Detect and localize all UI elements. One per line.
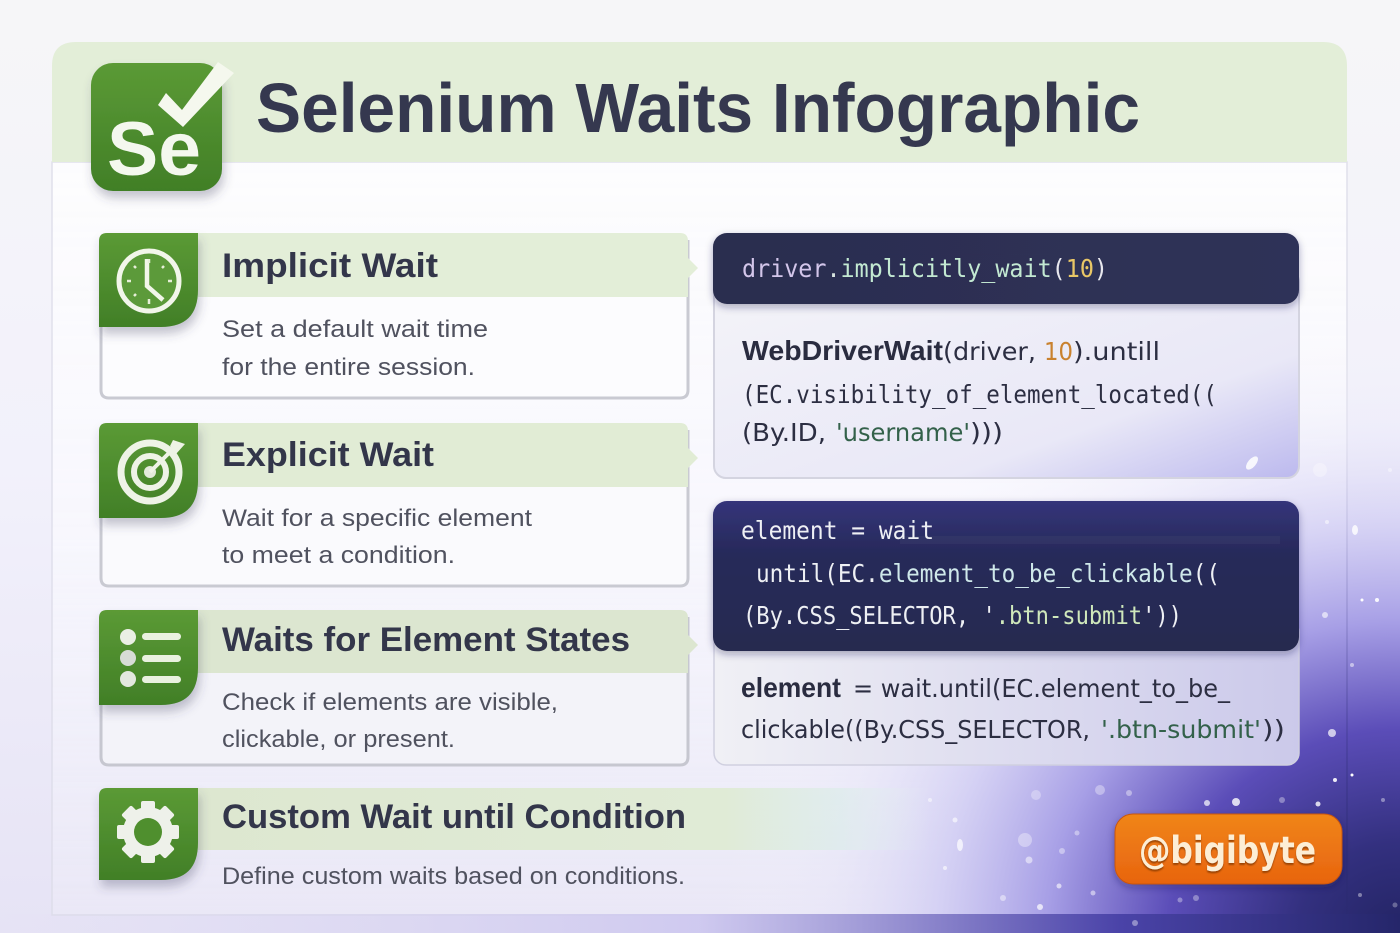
code body: WebDriverWait: 10	[1044, 337, 1073, 366]
code body: WebDriverWait: )))	[970, 418, 1003, 447]
description: for the entire session.	[222, 354, 475, 381]
description: Set a default wait time	[222, 316, 488, 343]
badge: @bigibyte	[1115, 814, 1342, 884]
code body: wait.until: clickable((By.CSS_SELECTOR,	[741, 715, 1090, 744]
code body: WebDriverWait: 'username'	[836, 418, 970, 447]
code panel: implicit and explicit wait	[713, 233, 1299, 478]
icon: clock	[99, 233, 198, 327]
logo check mark	[158, 62, 234, 127]
card: Waits for Element States	[99, 610, 698, 765]
description	[222, 689, 558, 753]
description: to meet a condition.	[222, 542, 455, 569]
code body: WebDriverWait: WebDriverWait	[742, 335, 943, 366]
icon: checklist	[99, 610, 198, 705]
title: Selenium Waits Infographic	[256, 69, 1140, 147]
logo: Selenium	[91, 62, 234, 192]
card: Implicit Wait	[99, 233, 698, 398]
code body: WebDriverWait: (driver,	[943, 337, 1036, 366]
code body: WebDriverWait	[742, 335, 1217, 447]
header band	[52, 42, 1347, 162]
code body: WebDriverWait: ).untill	[1073, 337, 1160, 366]
code header: wait until clickable: (By.CSS_SELECTOR, '.btn-submit'))	[743, 601, 1182, 630]
starfield	[928, 463, 1398, 926]
code header: wait until clickable	[713, 501, 1299, 651]
heading: Waits for Element States	[222, 621, 630, 659]
paint chip	[1244, 454, 1260, 472]
heading: Explicit Wait	[222, 436, 434, 474]
code body: wait.until	[741, 672, 1285, 744]
heading: Implicit Wait	[222, 247, 438, 285]
code body: WebDriverWait: (By.ID,	[742, 418, 826, 447]
purple nebula background	[0, 300, 1400, 933]
code header: wait until clickable: element = wait	[741, 516, 934, 545]
code body: wait.until: = wait.until(EC.element_to_be_	[853, 674, 1230, 703]
code body: WebDriverWait: (EC.visibility_of_element_located((	[742, 380, 1217, 409]
card: Custom Wait until Condition	[99, 788, 930, 890]
badge: @bigibyte: @bigibyte	[1139, 829, 1316, 872]
card: Explicit Wait	[99, 423, 698, 586]
description	[222, 505, 532, 569]
description: Check if elements are visible,	[222, 689, 558, 716]
heading: Custom Wait until Condition	[222, 798, 686, 836]
description	[222, 316, 488, 381]
icon: target	[99, 423, 198, 518]
code body: wait.until: '.btn-submit'	[1101, 715, 1261, 744]
code panel: element to be clickable	[713, 501, 1299, 765]
code header: implicitly_wait: driver.implicitly_wait(10)	[742, 254, 1108, 283]
description: clickable, or present.	[222, 726, 455, 753]
description: Wait for a specific element	[222, 505, 532, 532]
icon: gear	[99, 788, 198, 880]
code header: wait until clickable: until(EC.element_to_be_clickable((	[756, 559, 1220, 588]
logo lettering: Se	[107, 107, 201, 192]
code header: implicitly_wait	[713, 233, 1299, 304]
code body: wait.until: ))	[1262, 715, 1285, 744]
description: Define custom waits based on conditions.	[222, 863, 685, 890]
code body: wait.until: element	[741, 672, 841, 703]
